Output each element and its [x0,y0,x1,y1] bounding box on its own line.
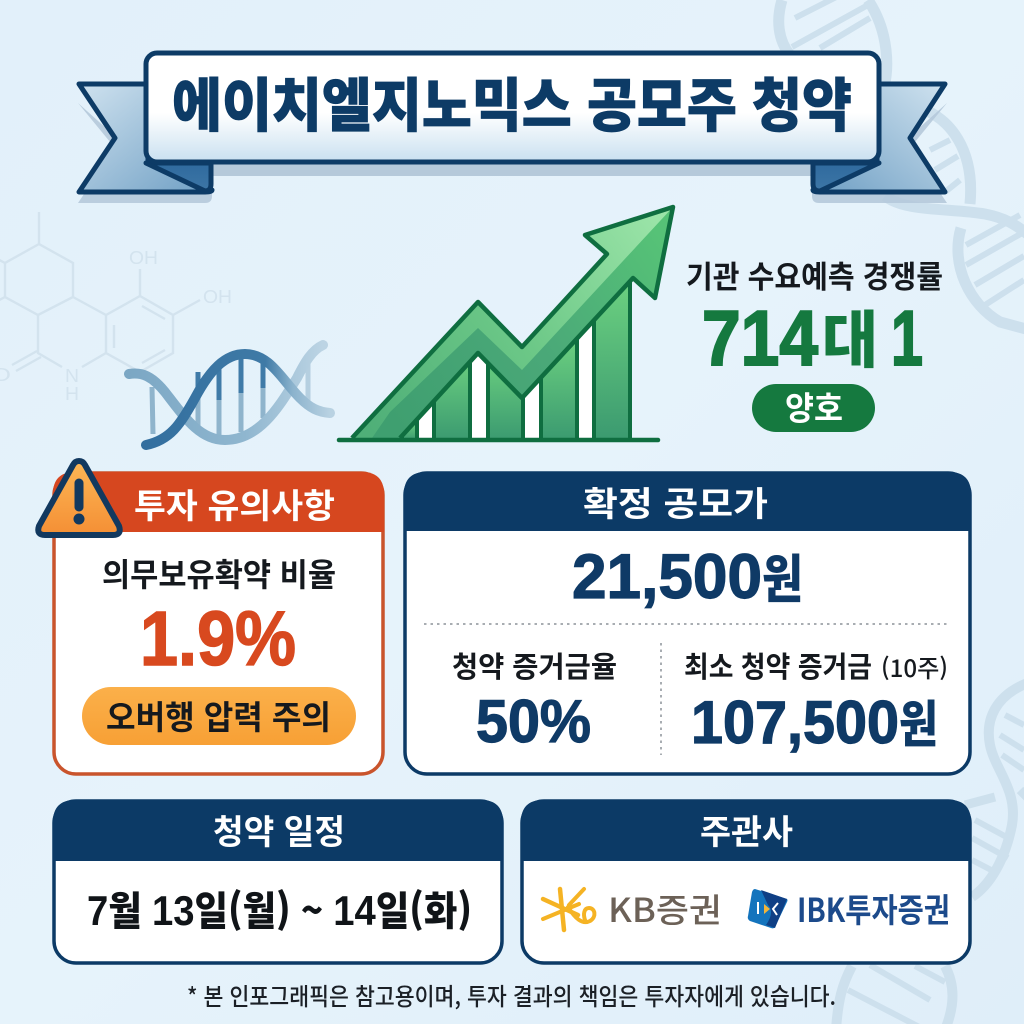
title ribbon [78,53,947,203]
IBK wordmark: IBK투자증권 [797,884,950,932]
arrow body [352,207,673,438]
panel body [405,473,970,774]
panel header [53,472,384,532]
ribbon shadows [78,103,947,203]
panel: investment caution [38,461,384,774]
offer price: 원 [762,538,803,613]
header text: 청약 일정 [213,805,345,854]
deposit rate [452,644,617,755]
minimum deposit: 최소 청약 증거금 [684,644,872,686]
header text: 주관사 [700,805,793,854]
lockup value: 1.9% [140,596,296,682]
deposit rate: 50% [476,688,591,755]
minimum deposit: 원 [899,685,938,757]
panel: offering price [404,472,971,774]
ribbon left tail [79,84,212,192]
deposit rate: 청약 증거금율 [452,644,617,686]
ribbon main panel [146,53,879,162]
panel header [404,472,971,531]
panel header [521,800,971,861]
icon: DNA helix [129,345,330,445]
molecule structure watermark: OH [129,248,158,268]
background DNA: lower right [836,682,1024,1024]
status pill: 양호 [785,382,843,430]
chart baseline [339,438,658,442]
molecule structure watermark: OH [203,287,232,307]
competition ratio block [686,252,943,432]
panel: subscription schedule [53,800,503,963]
minimum deposit: 107,500 [691,689,899,756]
title: 에이치엘지노믹스 공모주 청약 [172,59,852,143]
ribbon right tail [813,84,945,192]
panel header [53,800,503,861]
status pill [752,382,875,432]
KB wordmark: KB증권 [608,884,722,932]
schedule dates: 7월 13일(월) ~ 14일(화) [87,879,472,937]
arrow outline [352,207,673,438]
panel body [54,801,502,963]
ratio label: 기관 수요예측 경쟁률 [686,252,943,297]
icon: IBK logo [748,889,788,928]
panel body [54,473,383,774]
overhang pill [82,687,356,745]
molecule structure watermark: H [65,384,79,404]
icon: rising arrow chart [339,207,673,440]
lockup label: 의무보유확약 비율 [102,550,336,596]
icon: warning triangle [38,461,120,535]
background DNA: top right [779,0,1024,330]
offer price: 21,500 [572,542,762,612]
minimum deposit: (10주) [881,649,948,684]
ratio value: 1 [891,294,923,382]
green bars [402,272,630,440]
molecule structure watermark [0,212,232,404]
panel body [522,801,970,963]
overhang pill: 오버행 압력 주의 [106,691,331,739]
ratio value: 대 [822,290,878,380]
ratio value: 714 [702,294,818,382]
panel: lead underwriters [521,800,971,963]
footnote: * 본 인포그래픽은 참고용이며, 투자 결과의 책임은 투자자에게 있습니다. [187,977,836,1012]
minimum deposit [684,644,948,757]
header text: 투자 유의사항 [134,479,335,528]
ratio value [702,290,923,382]
icon: KB logo [543,889,594,930]
white bar gaps [416,316,594,440]
molecule structure watermark: N [65,366,79,386]
arrow shading [372,207,673,438]
header text: 확정 공모가 [583,477,768,526]
